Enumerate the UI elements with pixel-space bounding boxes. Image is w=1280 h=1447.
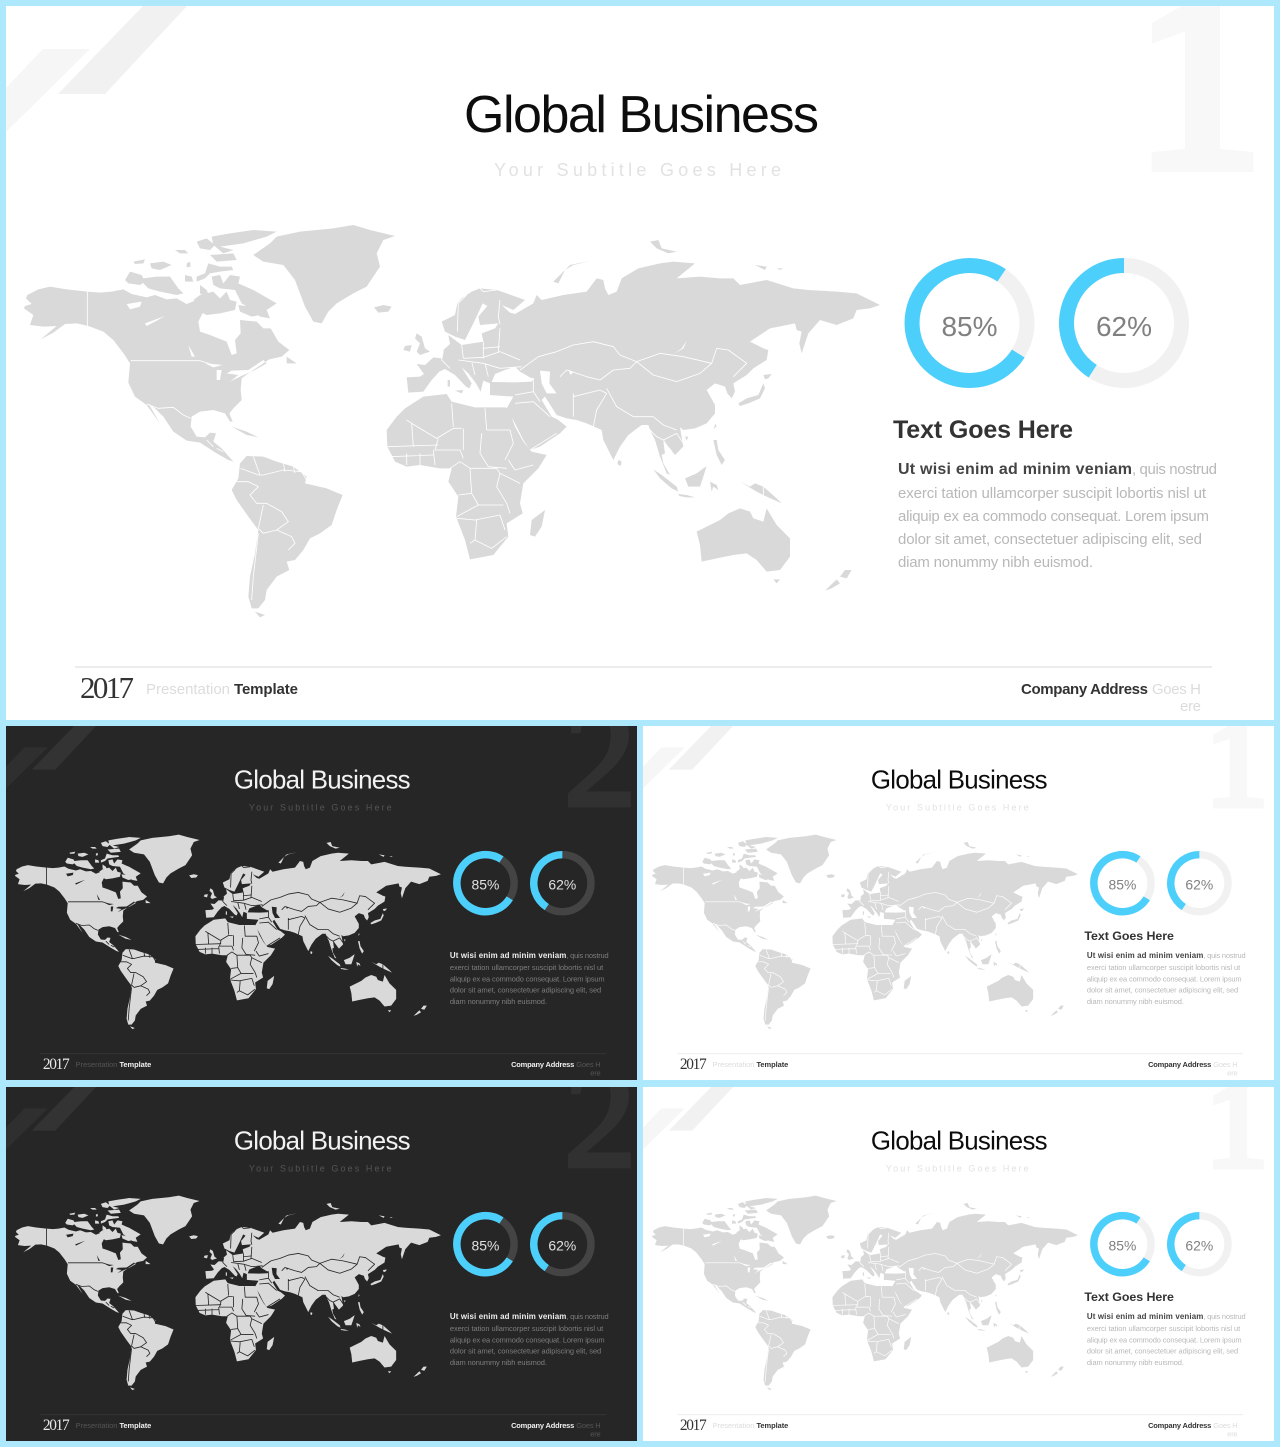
footer right: Goes H — [1152, 681, 1201, 698]
footer left — [43, 1056, 151, 1073]
heading: text goes here: Text Goes Here — [1084, 1290, 1174, 1304]
title: Global Business — [871, 767, 1048, 794]
body text: dolor sit amet, consectetuer adipiscing elit, sed — [450, 986, 601, 995]
title: Global Business — [871, 1128, 1048, 1155]
body text: , quis nostrud — [1132, 461, 1217, 478]
footer left: 2017 — [680, 1056, 707, 1073]
donut chart: 62% — [534, 1216, 591, 1273]
body text: dolor sit amet, consectetuer adipiscing elit, sed — [1087, 986, 1238, 995]
body text: , quis nostrud — [566, 1312, 609, 1321]
footer left: 2017 — [80, 670, 134, 705]
donut chart: 85%: 85% — [1109, 1238, 1136, 1254]
body text: Ut wisi enim ad minim veniam — [1087, 951, 1203, 960]
body text: aliquip ex ea commodo consequat. Lorem ipsum — [1087, 1335, 1242, 1344]
body text: diam nonummy nibh euismod. — [1087, 1358, 1184, 1367]
body text: exerci tation ullamcorper suscipit lobortis nisl ut — [1087, 1324, 1241, 1333]
world map — [15, 835, 441, 1029]
body text: , quis nostrud — [1203, 1312, 1246, 1321]
body text: diam nonummy nibh euismod. — [898, 554, 1093, 571]
donut chart: 85%: 85% — [941, 311, 998, 342]
decorative corner stripes — [6, 726, 96, 788]
subtitle: Your Subtitle Goes Here — [886, 802, 1029, 812]
donut chart: 85% — [457, 1216, 514, 1273]
footer right: ere — [1227, 1430, 1238, 1439]
body text: aliquip ex ea commodo consequat. Lorem ipsum — [450, 974, 605, 983]
footer right: ere — [1180, 698, 1201, 715]
decorative corner stripes — [643, 726, 733, 788]
footer right: ere — [590, 1069, 601, 1078]
donut chart: 62%: 62% — [1185, 1238, 1213, 1254]
footer right — [1148, 1060, 1238, 1078]
body text: exerci tation ullamcorper suscipit lobortis nisl ut — [898, 485, 1207, 502]
donut chart: 85%: 85% — [472, 1238, 499, 1254]
body text — [1087, 951, 1246, 1006]
footer left: Presentation — [76, 1421, 117, 1430]
footer right: ere — [590, 1430, 601, 1439]
body text: Ut wisi enim ad minim veniam — [450, 1312, 566, 1321]
panel: small light slide, row 1 — [643, 726, 1274, 1080]
body text: diam nonummy nibh euismod. — [1087, 997, 1184, 1006]
subtitle: Your Subtitle Goes Here — [249, 1163, 392, 1173]
footer right: Company Address — [1148, 1421, 1211, 1430]
footer left: Presentation — [713, 1421, 754, 1430]
subtitle: Your Subtitle Goes Here — [249, 802, 392, 812]
footer left — [43, 1417, 151, 1434]
donut chart: 85% — [1094, 855, 1151, 912]
heading: text goes here: Text Goes Here — [893, 416, 1073, 444]
body text: exerci tation ullamcorper suscipit lobortis nisl ut — [1087, 963, 1241, 972]
footer right: Company Address — [511, 1421, 574, 1430]
body text: aliquip ex ea commodo consequat. Lorem ipsum — [1087, 974, 1242, 983]
footer right — [1148, 1421, 1238, 1439]
footer right: Goes H — [1213, 1421, 1238, 1430]
body text: exerci tation ullamcorper suscipit lobortis nisl ut — [450, 1324, 604, 1333]
body text: aliquip ex ea commodo consequat. Lorem ipsum — [898, 508, 1209, 525]
decorative corner stripes — [6, 6, 187, 132]
footer right — [511, 1060, 601, 1078]
donut chart: 62% — [1171, 855, 1228, 912]
footer right: Goes H — [1213, 1060, 1238, 1069]
heading: text goes here: Text Goes Here — [1084, 929, 1174, 943]
world map — [652, 835, 1078, 1029]
donut chart: 62%: 62% — [1185, 877, 1213, 893]
body text: , quis nostrud — [566, 951, 609, 960]
body text — [450, 1312, 609, 1367]
world map — [652, 1196, 1078, 1390]
footer left: Template — [756, 1421, 788, 1430]
body text: aliquip ex ea commodo consequat. Lorem ipsum — [450, 1335, 605, 1344]
footer left: 2017 — [680, 1417, 707, 1434]
body text: Ut wisi enim ad minim veniam — [1087, 1312, 1203, 1321]
footer left: 2017 — [43, 1417, 70, 1434]
title: Global Business — [464, 86, 819, 144]
footer right: Company Address — [1021, 681, 1148, 698]
title: Global Business — [234, 1128, 411, 1155]
world map — [15, 1196, 441, 1390]
body text: , quis nostrud — [1203, 951, 1246, 960]
footer right: Goes H — [576, 1421, 601, 1430]
donut chart: 62%: 62% — [548, 1238, 576, 1254]
footer right — [1021, 681, 1201, 715]
donut chart: 85% — [457, 855, 514, 912]
body text: diam nonummy nibh euismod. — [450, 997, 547, 1006]
donut chart: 85%: 85% — [1109, 877, 1136, 893]
footer left: Template — [756, 1060, 788, 1069]
body text: exerci tation ullamcorper suscipit lobortis nisl ut — [450, 963, 604, 972]
panel: small dark slide, row 1 — [6, 726, 637, 1080]
panel: large light slide — [6, 6, 1274, 720]
footer right: Goes H — [576, 1060, 601, 1069]
footer left: Presentation — [76, 1060, 117, 1069]
subtitle: Your Subtitle Goes Here — [886, 1163, 1029, 1173]
body text: dolor sit amet, consectetuer adipiscing elit, sed — [450, 1347, 601, 1356]
footer right: Company Address — [1148, 1060, 1211, 1069]
subtitle: Your Subtitle Goes Here — [494, 160, 781, 180]
body text: dolor sit amet, consectetuer adipiscing elit, sed — [898, 531, 1202, 548]
footer left: Presentation — [146, 681, 230, 698]
body text: Ut wisi enim ad minim veniam — [450, 951, 566, 960]
body text — [1087, 1312, 1246, 1367]
footer left — [680, 1417, 788, 1434]
footer left: Template — [234, 681, 298, 698]
title: Global Business — [234, 767, 411, 794]
donut chart: 62%: 62% — [1096, 311, 1152, 342]
footer left: Presentation — [713, 1060, 754, 1069]
body text: dolor sit amet, consectetuer adipiscing elit, sed — [1087, 1347, 1238, 1356]
footer left: Template — [119, 1421, 151, 1430]
donut chart: 62% — [1066, 266, 1182, 380]
decorative corner stripes — [6, 1087, 96, 1149]
world map — [24, 225, 880, 617]
donut chart: 62%: 62% — [548, 877, 576, 893]
footer right: ere — [1227, 1069, 1238, 1078]
footer left — [80, 670, 298, 705]
donut chart: 85% — [912, 266, 1027, 381]
body text — [898, 461, 1217, 571]
footer right: Company Address — [511, 1060, 574, 1069]
panel: small dark slide, row 2 — [6, 1087, 637, 1441]
decorative corner stripes — [643, 1087, 733, 1149]
footer left — [680, 1056, 788, 1073]
donut chart: 62% — [534, 855, 591, 912]
body text: Ut wisi enim ad minim veniam — [898, 461, 1132, 478]
footer right — [511, 1421, 601, 1439]
body text: diam nonummy nibh euismod. — [450, 1358, 547, 1367]
body text — [450, 951, 609, 1006]
footer left: 2017 — [43, 1056, 70, 1073]
donut chart: 62% — [1171, 1216, 1228, 1273]
donut chart: 85% — [1094, 1216, 1151, 1273]
donut chart: 85%: 85% — [472, 877, 499, 893]
footer left: Template — [119, 1060, 151, 1069]
panel: small light slide, row 2 — [643, 1087, 1274, 1441]
